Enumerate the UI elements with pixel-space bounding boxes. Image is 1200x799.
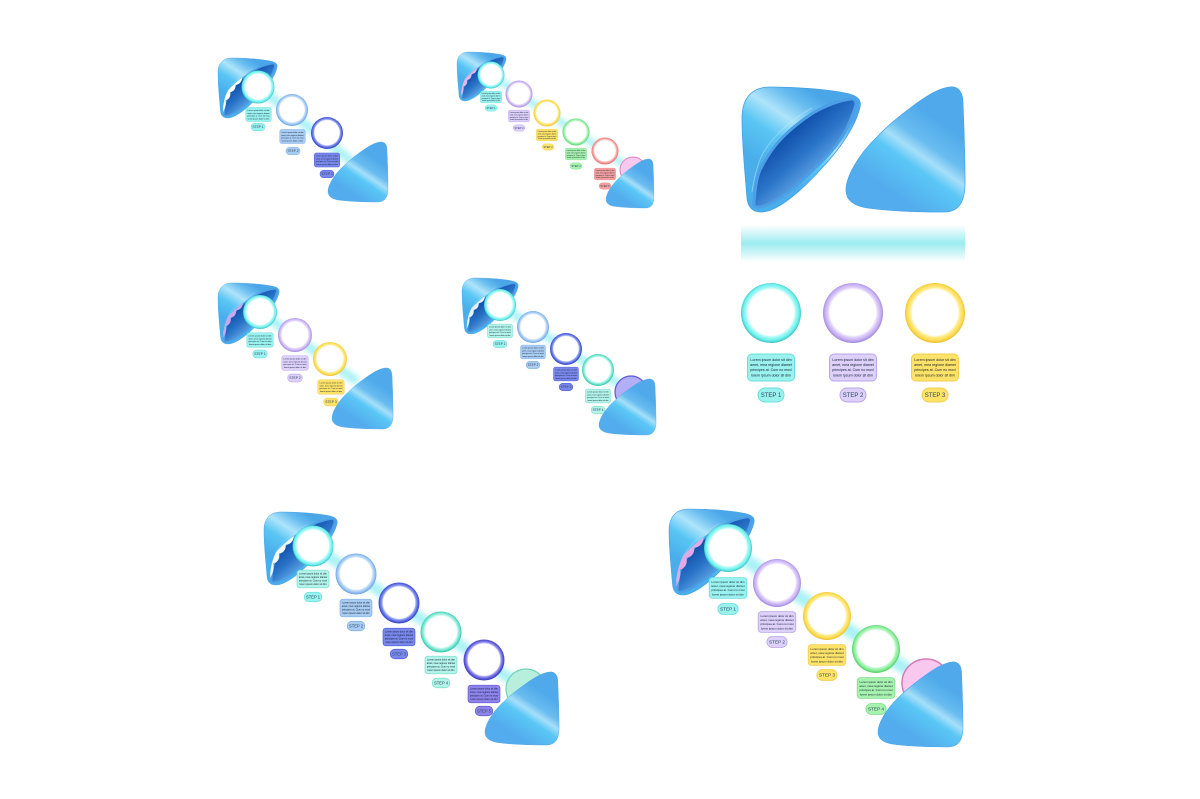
step 5 peeking circle: [615, 376, 647, 408]
step 3 text box: principes at. Cum no movi: [555, 374, 578, 377]
step 1 text box: lorem ipsum dolor sit dim: [482, 99, 501, 102]
step 4 text box: lorem ipsum dolor sit dim: [587, 399, 609, 402]
large closed cone: [846, 87, 965, 212]
step 4 text box: [586, 389, 610, 403]
step 2 ring: [276, 94, 308, 126]
step 3 label: STEP 3: [819, 673, 835, 678]
step 1 label: STEP 1: [306, 594, 321, 599]
step 3 text box: Lorem ipsum dolor sit dim: [811, 647, 844, 651]
step 5 text box: lorem ipsum dolor sit dim: [470, 698, 498, 701]
step 5 label: [475, 706, 493, 716]
step 3 label: STEP 3: [561, 385, 572, 389]
step 3 text box: amet, mea regione diamet: [319, 384, 343, 387]
step 1 text box: lorem ipsum dolor sit dim: [249, 343, 271, 346]
step 3 text box: principes at. Cum no movi: [914, 368, 956, 372]
step 1 label: [485, 105, 497, 111]
step 1 text box: amet, mea regione diamet: [750, 363, 792, 367]
step 1 text box: principes at. Cum no movi: [248, 340, 272, 343]
step 1 text box: Lorem ipsum dolor sit dim: [750, 358, 792, 362]
step 4 label: [591, 406, 605, 414]
step 2 ring: [506, 80, 532, 108]
step 3 text box: [536, 129, 558, 141]
panel: four-step template, middle: [462, 278, 656, 435]
step 2 text box: Lorem ipsum dolor sit dim: [284, 357, 307, 360]
step 2 text box: principes at. Cum no movi: [832, 368, 874, 372]
step 5 text box: [594, 168, 616, 180]
step 2 text box: [758, 612, 796, 632]
step 3 text box: Lorem ipsum dolor sit dim: [316, 154, 338, 157]
panel: four-step template, bottom right: [669, 509, 963, 747]
glow band: [741, 225, 965, 262]
step 2 text box: [521, 345, 545, 359]
step 4 text box: lorem ipsum dolor sit dim: [427, 669, 455, 672]
step 1 text box: Lorem ipsum dolor sit dim: [482, 92, 501, 95]
step 2 text box: amet, mea regione diamet: [342, 605, 370, 608]
step 3 text box: lorem ipsum dolor sit dim: [915, 373, 955, 377]
step 4 text box: amet, mea regione diamet: [567, 151, 586, 154]
step 1 label: STEP 1: [486, 106, 496, 110]
step 4 text box: Lorem ipsum dolor sit dim: [567, 149, 586, 152]
step 2 label: STEP 2: [769, 640, 785, 645]
step 5 text box: Lorem ipsum dolor sit dim: [596, 169, 615, 172]
step 2 text box: amet, mea regione diamet: [522, 349, 544, 352]
step 3 ring: [378, 582, 420, 624]
step 3 text box: [318, 380, 344, 394]
step 3 text box: Lorem ipsum dolor sit dim: [538, 130, 557, 133]
step 5 ring: [464, 640, 504, 680]
step 2 ring: [517, 311, 549, 343]
step 3 text box: amet, mea regione diamet: [316, 157, 339, 160]
step 5 text box: [468, 685, 500, 703]
step 1 text box: principes at. Cum no movi: [247, 115, 270, 118]
step 1 text box: amet, mea regione diamet: [248, 337, 272, 340]
step 2 ring: [753, 559, 801, 607]
connector glow: [491, 75, 625, 165]
step 2 text box: Lorem ipsum dolor sit dim: [342, 602, 370, 605]
step 2 text box: [282, 356, 308, 370]
step 1 label: STEP 1: [495, 342, 506, 346]
step 2 text box: [340, 599, 372, 617]
step 2 text box: amet, mea regione diamet: [283, 360, 307, 363]
step 3 text box: Lorem ipsum dolor sit dim: [555, 369, 577, 372]
step 2 text box: Lorem ipsum dolor sit dim: [510, 111, 529, 114]
step 2 text box: lorem ipsum dolor sit dim: [342, 612, 370, 615]
step 4 ring: [420, 612, 462, 652]
open cone: [457, 52, 506, 101]
closed cone: [599, 379, 656, 435]
step 3 label: [320, 170, 334, 178]
step 4 text box: Lorem ipsum dolor sit dim: [587, 391, 609, 394]
step 1 text box: amet, mea regione diamet: [299, 576, 327, 579]
step 2 label: [286, 147, 300, 155]
step 3 text box: principes at. Cum no movi: [316, 160, 339, 163]
step 3 text box: lorem ipsum dolor sit dim: [385, 641, 413, 644]
step 6 peeking circle: [620, 157, 646, 183]
panel: component kit, top right: [741, 87, 965, 402]
step 2 text box: lorem ipsum dolor sit dim: [761, 626, 794, 630]
step 4 text box: lorem ipsum dolor sit dim: [567, 156, 586, 159]
step 3 text box: [554, 367, 578, 381]
step 3 text box: [383, 628, 415, 646]
step 1 text box: [247, 333, 273, 347]
step 3 label: STEP 3: [392, 651, 407, 656]
step 1 ring: [704, 524, 752, 572]
step 2 text box: [508, 110, 530, 122]
connector glow: [728, 548, 915, 675]
step 1 text box: [488, 324, 512, 338]
step 3 text box: amet, mea regione diamet: [538, 132, 557, 135]
step 4 text box: [425, 656, 457, 674]
step 4 text box: principes at. Cum no movi: [427, 666, 456, 669]
step 1 ring: [484, 289, 516, 321]
step 3 label: [817, 670, 837, 680]
step 4 text box: principes at. Cum no movi: [587, 396, 610, 399]
step 1 label: [493, 340, 507, 348]
open cone: [669, 509, 754, 595]
step 5 text box: lorem ipsum dolor sit dim: [596, 176, 615, 179]
step 2 text box: lorem ipsum dolor sit dim: [510, 118, 529, 121]
step 2 ring: [278, 318, 312, 352]
step 3 label: [390, 649, 408, 659]
connector glow: [260, 312, 355, 380]
step 2 label: [288, 374, 302, 382]
closed cone: [332, 368, 393, 429]
step 2 text box: amet, mea regione diamet: [281, 134, 304, 137]
step 1 text box: Lorem ipsum dolor sit dim: [249, 334, 272, 337]
step 5 text box: principes at. Cum no movi: [470, 695, 499, 698]
step 2 label: STEP 2: [843, 393, 864, 399]
panel: three-step template, middle left: [218, 283, 393, 429]
step 2 label: [840, 388, 866, 402]
step 1 ring: [292, 526, 334, 566]
step 5 peeking circle: [902, 659, 950, 707]
step 3 ring: [311, 117, 343, 149]
step 4 ring: [582, 354, 614, 386]
step 5 label: [599, 183, 611, 189]
step 1 text box: lorem ipsum dolor sit dim: [489, 334, 511, 337]
step 2 label: STEP 2: [287, 149, 299, 153]
step 3 label: [324, 398, 338, 406]
step 5 text box: principes at. Cum no movi: [596, 174, 615, 177]
step 2 ring: [336, 554, 376, 594]
step 5 label: STEP 5: [477, 708, 492, 713]
connector glow: [258, 87, 350, 160]
step 1 text box: principes at. Cum no movi: [711, 588, 745, 592]
step 5 text box: amet, mea regione diamet: [470, 691, 498, 694]
step 3 text box: principes at. Cum no movi: [385, 638, 414, 641]
step 4 label: [866, 704, 886, 714]
open cone: [218, 283, 279, 344]
step 2 text box: amet, mea regione diamet: [510, 113, 529, 116]
step 1 text box: lorem ipsum dolor sit dim: [712, 592, 745, 596]
step 2 label: STEP 2: [514, 126, 524, 130]
step 3 label: [542, 144, 554, 150]
step 4 ring: [852, 625, 900, 673]
step 1 text box: principes at. Cum no movi: [482, 97, 501, 100]
panel: five-step template, top middle: [457, 52, 654, 208]
step 2 text box: Lorem ipsum dolor sit dim: [761, 614, 794, 618]
step 1 label: STEP 1: [254, 352, 266, 356]
step 3 label: STEP 3: [325, 400, 337, 404]
step 4 text box: [857, 678, 895, 698]
step 1 text box: [709, 578, 747, 598]
open cone: [218, 58, 277, 118]
step 4 label: STEP 4: [434, 680, 449, 685]
step 1 text box: [480, 91, 502, 103]
step 1 text box: Lorem ipsum dolor sit dim: [247, 109, 270, 112]
step 2 label: [347, 621, 365, 631]
step 2 text box: principes at. Cum no movi: [510, 116, 529, 119]
step 1 text box: amet, mea regione diamet: [711, 584, 745, 588]
step 3 text box: lorem ipsum dolor sit dim: [811, 659, 844, 663]
step 1 ring: [242, 70, 274, 104]
step 3 text box: lorem ipsum dolor sit dim: [555, 377, 577, 380]
step 3 text box: Lorem ipsum dolor sit dim: [385, 631, 413, 634]
step 3 text box: Lorem ipsum dolor sit dim: [914, 358, 956, 362]
step 3 text box: amet, mea regione diamet: [810, 651, 844, 655]
step 1 text box: [246, 107, 271, 122]
step 2 text box: amet, mea regione diamet: [760, 618, 794, 622]
step 2 text box: Lorem ipsum dolor sit dim: [832, 358, 874, 362]
closed cone: [485, 672, 559, 745]
step 2 text box: lorem ipsum dolor sit dim: [284, 366, 306, 369]
open cone: [264, 512, 337, 585]
step 5 ring: [592, 138, 618, 164]
step 1 text box: [748, 354, 794, 381]
step 1 text box: lorem ipsum dolor sit dim: [751, 373, 791, 377]
step 4 label: STEP 4: [571, 164, 581, 168]
step 4 text box: principes at. Cum no movi: [567, 154, 586, 157]
step 4 label: [570, 163, 582, 169]
step 3 text box: lorem ipsum dolor sit dim: [320, 390, 342, 393]
step 4 label: [432, 678, 450, 688]
step 2 text box: principes at. Cum no movi: [760, 622, 794, 626]
step 3 text box: [314, 153, 340, 167]
step 1 text box: Lorem ipsum dolor sit dim: [489, 326, 511, 329]
step 1 label: [304, 592, 322, 602]
step 1 text box: lorem ipsum dolor sit dim: [299, 583, 327, 586]
yellow ring: [905, 283, 965, 343]
step 2 label: STEP 2: [528, 363, 539, 367]
step 3 text box: Lorem ipsum dolor sit dim: [320, 381, 343, 384]
step 3 text box: lorem ipsum dolor sit dim: [316, 163, 338, 166]
step 2 text box: principes at. Cum no movi: [522, 352, 545, 355]
step 4 text box: [565, 148, 587, 160]
step 2 text box: [830, 354, 876, 381]
step 3 ring: [803, 592, 851, 640]
step 3 ring: [534, 100, 560, 126]
connector glow: [313, 546, 515, 682]
step 2 label: [526, 361, 540, 369]
step 3 ring: [313, 342, 347, 376]
step 1 text box: amet, mea regione diamet: [482, 94, 501, 97]
step 1 text box: Lorem ipsum dolor sit dim: [712, 580, 745, 584]
step 1 label: [251, 123, 265, 131]
closed cone: [878, 662, 963, 747]
step 2 text box: lorem ipsum dolor sit dim: [282, 139, 304, 142]
step 1 text box: [297, 570, 329, 588]
closed cone: [606, 159, 654, 208]
step 3 text box: principes at. Cum no movi: [319, 387, 343, 390]
step 1 label: [718, 604, 738, 614]
step 6 peeking circle: [506, 669, 546, 709]
step 3 text box: amet, mea regione diamet: [555, 371, 577, 374]
step 1 label: STEP 1: [761, 393, 782, 399]
lavender ring: [823, 283, 883, 343]
step 1 label: STEP 1: [720, 607, 736, 612]
step 2 text box: [280, 129, 305, 144]
step 3 text box: lorem ipsum dolor sit dim: [538, 137, 557, 140]
step 2 label: [513, 125, 525, 131]
step 4 label: STEP 4: [593, 408, 604, 412]
step 3 ring: [550, 333, 582, 365]
step 4 text box: amet, mea regione diamet: [587, 393, 609, 396]
step 1 text box: amet, mea regione diamet: [247, 112, 270, 115]
open cone: [462, 278, 518, 334]
step 3 label: STEP 3: [321, 172, 333, 176]
step 5 text box: amet, mea regione diamet: [596, 171, 615, 174]
step 1 ring: [243, 295, 277, 329]
panel: three-step template, top left: [218, 58, 388, 202]
step 2 text box: lorem ipsum dolor sit dim: [522, 355, 544, 358]
step 2 text box: principes at. Cum no movi: [281, 137, 304, 140]
step 1 label: [253, 350, 267, 358]
step 1 label: [758, 388, 784, 402]
step 4 label: STEP 4: [868, 707, 884, 712]
step 2 text box: Lorem ipsum dolor sit dim: [522, 347, 544, 350]
closed cone: [328, 142, 388, 202]
step 3 label: [559, 383, 573, 391]
step 1 label: STEP 1: [252, 125, 264, 129]
step 2 text box: amet, mea regione diamet: [832, 363, 874, 367]
step 4 text box: amet, mea regione diamet: [859, 684, 893, 688]
step 1 text box: lorem ipsum dolor sit dim: [248, 117, 270, 120]
step 3 text box: principes at. Cum no movi: [538, 135, 557, 138]
step 3 text box: amet, mea regione diamet: [914, 363, 956, 367]
step 2 text box: principes at. Cum no movi: [283, 363, 307, 366]
step 3 label: STEP 3: [543, 145, 553, 149]
step 1 text box: amet, mea regione diamet: [489, 328, 511, 331]
step 3 label: STEP 3: [925, 393, 946, 399]
step 2 label: STEP 2: [349, 623, 364, 628]
step 5 text box: Lorem ipsum dolor sit dim: [470, 688, 498, 691]
step 3 label: [922, 388, 948, 402]
step 1 text box: Lorem ipsum dolor sit dim: [299, 573, 327, 576]
connector glow: [500, 305, 620, 385]
step 2 text box: principes at. Cum no movi: [342, 609, 371, 612]
step 2 label: [767, 637, 787, 647]
step 1 text box: principes at. Cum no movi: [750, 368, 792, 372]
step 1 ring: [478, 62, 504, 88]
step 1 text box: principes at. Cum no movi: [489, 331, 512, 334]
step 4 text box: lorem ipsum dolor sit dim: [860, 692, 893, 696]
step 2 label: STEP 2: [289, 376, 301, 380]
panel: five-step template, bottom left: [264, 512, 559, 745]
step 3 text box: amet, mea regione diamet: [385, 634, 413, 637]
large open cone: [742, 87, 860, 212]
step 1 text box: principes at. Cum no movi: [299, 580, 328, 583]
step 4 text box: principes at. Cum no movi: [859, 688, 893, 692]
step 5 label: STEP 5: [600, 184, 610, 188]
cyan ring: [741, 283, 801, 343]
step 3 text box: principes at. Cum no movi: [810, 655, 844, 659]
step 4 text box: amet, mea regione diamet: [427, 662, 455, 665]
step 4 text box: Lorem ipsum dolor sit dim: [427, 659, 455, 662]
step 2 text box: Lorem ipsum dolor sit dim: [281, 131, 304, 134]
step 4 ring: [562, 118, 590, 146]
step 4 text box: Lorem ipsum dolor sit dim: [860, 680, 893, 684]
step 3 text box: [808, 645, 846, 665]
step 3 text box: [912, 354, 958, 381]
step 2 text box: lorem ipsum dolor sit dim: [833, 373, 873, 377]
